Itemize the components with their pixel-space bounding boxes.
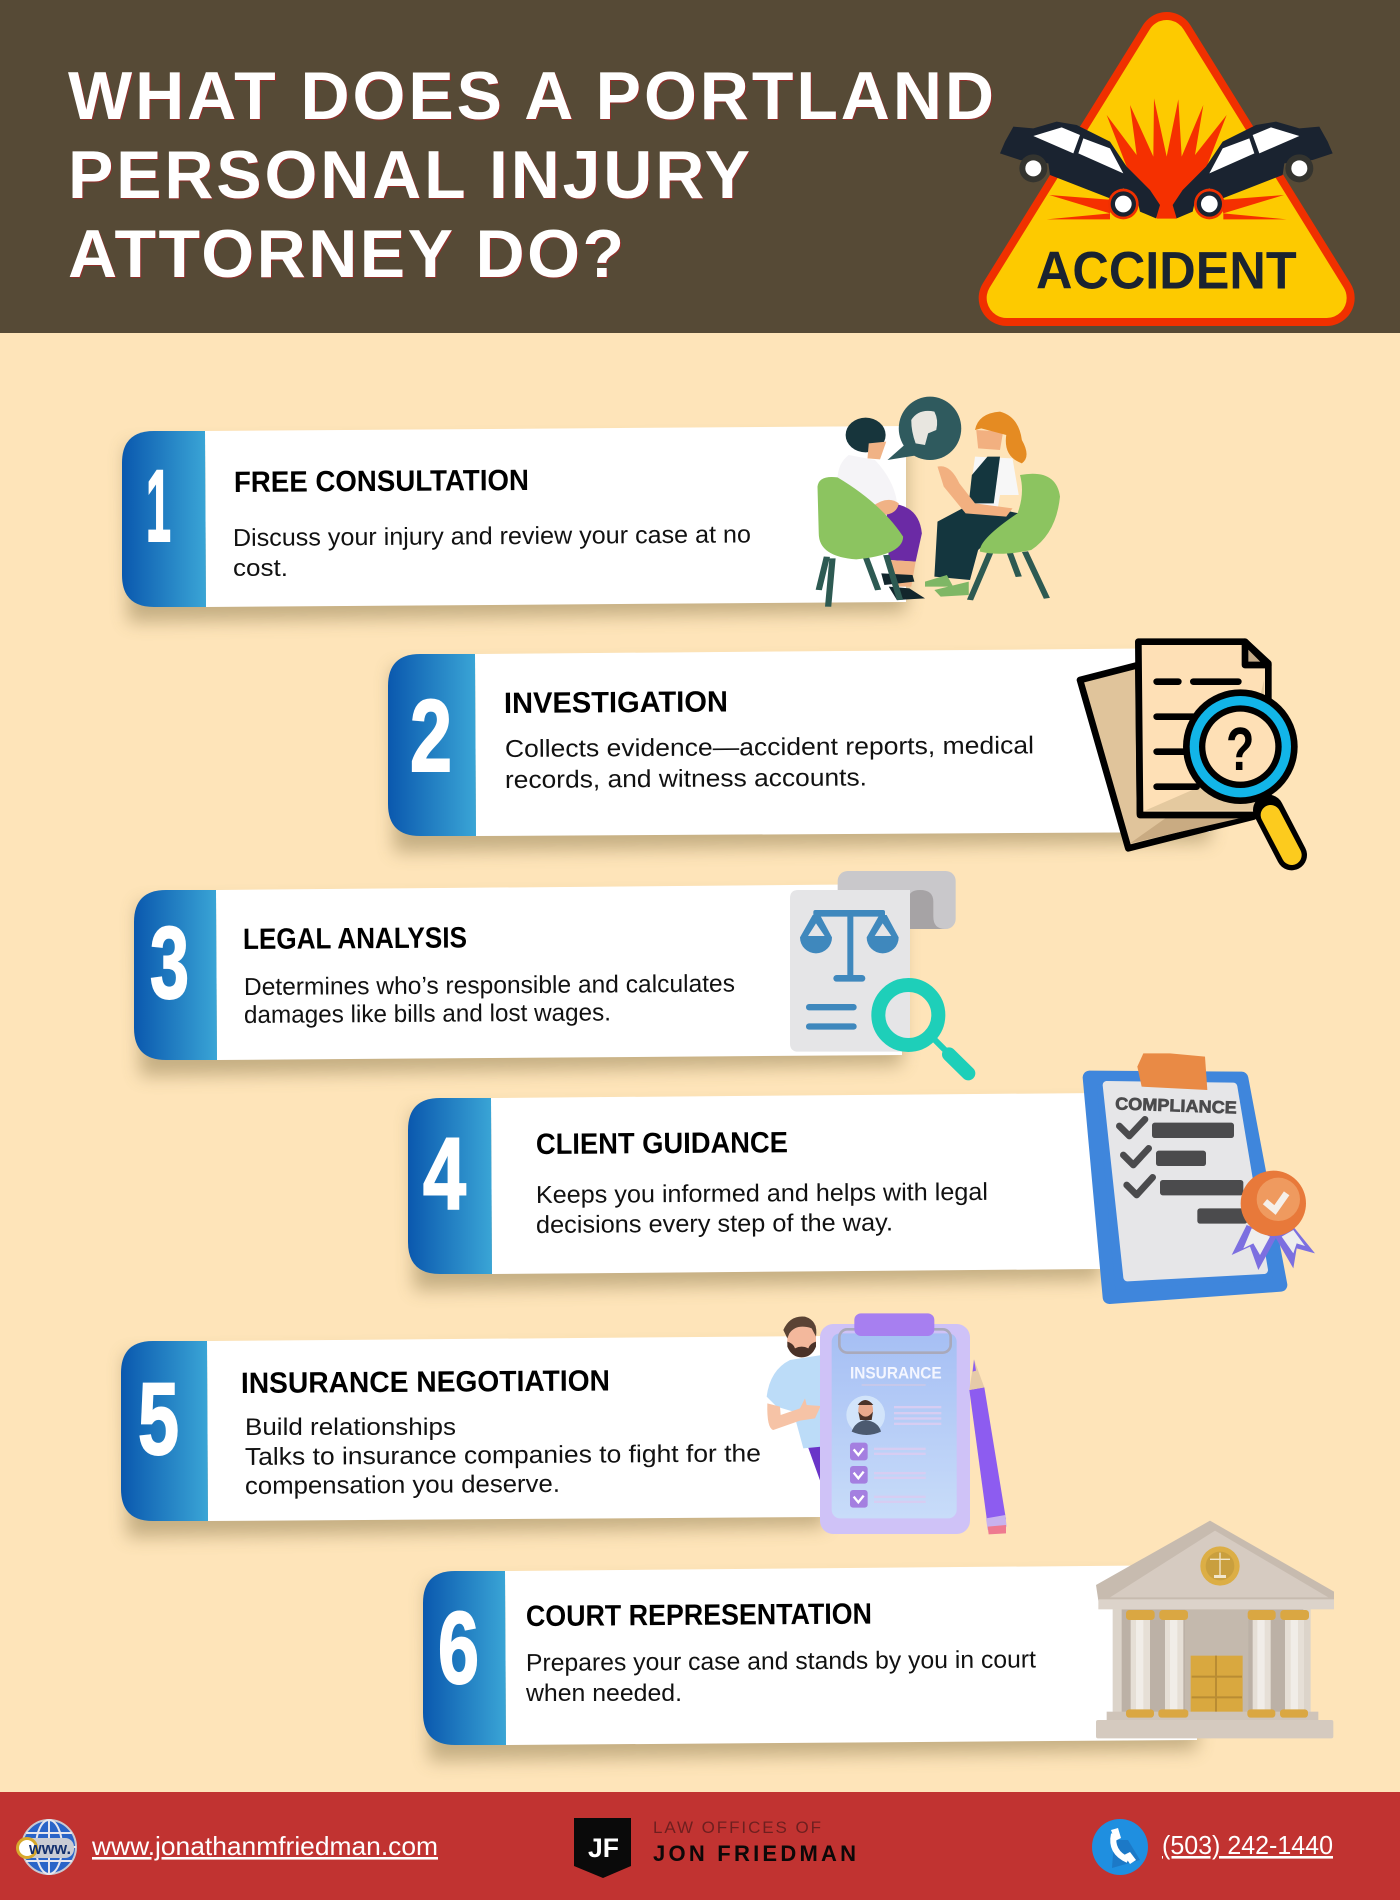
heading: FREE CONSULTATION <box>234 464 529 499</box>
number badge 1 <box>122 431 206 607</box>
icon: compliance clipboard with medal: COMPLIANCE <box>1115 1093 1237 1118</box>
body text: compensation you deserve. <box>245 1471 560 1500</box>
panel: step 1 free consultation <box>122 397 1060 622</box>
body text <box>233 521 751 582</box>
title <box>68 58 994 292</box>
icon: legal document with scales and magnifier <box>790 871 968 1073</box>
heading: INSURANCE NEGOTIATION <box>241 1364 610 1400</box>
number badge 5 <box>121 1341 208 1521</box>
man <box>767 1316 822 1485</box>
logo: Jon Friedman: JON FRIEDMAN <box>653 1841 856 1866</box>
speech bubble <box>888 397 961 460</box>
body text: Build relationships <box>245 1414 456 1441</box>
heading: CLIENT GUIDANCE <box>536 1126 788 1161</box>
number badge 4 <box>408 1098 492 1274</box>
scales of justice <box>800 910 899 1030</box>
title: ATTORNEY DO? <box>68 216 624 292</box>
number badge 1: 1 <box>146 449 171 563</box>
panel: step 2 investigation <box>388 642 1298 855</box>
icon: phone <box>1092 1819 1148 1875</box>
footer band <box>0 1792 1400 1900</box>
logo: Jon Friedman: LAW OFFICES OF <box>653 1818 821 1837</box>
title: WHAT DOES A PORTLAND <box>68 58 994 134</box>
number badge 5: 5 <box>138 1362 179 1476</box>
seated advisor with orange hair <box>925 412 1027 597</box>
number badge 2 <box>388 654 476 836</box>
body text: Determines who’s responsible and calculates <box>244 971 735 1001</box>
number badge 3 <box>134 890 217 1060</box>
phone number: (503) 242-1440 <box>1162 1830 1333 1860</box>
clipboard: INSURANCE <box>850 1363 942 1382</box>
body text: cost. <box>233 555 288 582</box>
icon: courthouse <box>1096 1521 1334 1738</box>
header band <box>0 0 1400 333</box>
icon: two people in consultation <box>818 397 1060 607</box>
heading: LEGAL ANALYSIS <box>243 921 467 956</box>
website link: www.jonathanmfriedman.com <box>91 1831 438 1861</box>
number badge 4: 4 <box>423 1117 466 1231</box>
icon: globe with www <box>18 1820 76 1874</box>
body text <box>244 971 735 1029</box>
logo: Jon Friedman <box>574 1818 856 1878</box>
body text: Discuss your injury and review your case at no <box>233 521 751 552</box>
heading: COURT REPRESENTATION <box>526 1598 872 1633</box>
panel: step 5 insurance negotiation <box>121 1313 1007 1537</box>
title: PERSONAL INJURY <box>68 137 750 213</box>
number badge 6: 6 <box>438 1591 479 1705</box>
left chair <box>818 477 903 607</box>
icon: accident warning sign: ACCIDENT <box>1036 241 1297 300</box>
body text: Collects evidence—accident reports, medical <box>505 732 1034 763</box>
panel: step 3 legal analysis <box>134 871 968 1076</box>
icon: globe with www: www. <box>28 1839 71 1858</box>
icon: compliance clipboard with medal <box>1089 1053 1315 1297</box>
icon: accident warning sign <box>1000 40 1333 300</box>
number badge 2: 2 <box>410 679 452 793</box>
body text: decisions every step of the way. <box>536 1210 893 1239</box>
body text <box>505 732 1034 794</box>
body text: records, and witness accounts. <box>505 764 867 794</box>
body text: Talks to insurance companies to fight for the <box>245 1440 761 1471</box>
icon: man pointing at insurance clipboard with pencil <box>767 1313 1007 1534</box>
number badge 3: 3 <box>150 906 189 1020</box>
icon: documents with magnifying glass <box>1080 642 1298 855</box>
body text: when needed. <box>525 1680 682 1707</box>
body text <box>245 1414 761 1500</box>
body text <box>536 1179 988 1239</box>
number badge 6 <box>423 1571 506 1745</box>
panel: step 6 court representation <box>423 1521 1334 1761</box>
right chair <box>970 474 1060 600</box>
logo: Jon Friedman: JF <box>588 1833 619 1863</box>
body text <box>525 1646 1036 1707</box>
body text: Prepares your case and stands by you in court <box>526 1646 1036 1677</box>
clipboard <box>820 1313 970 1534</box>
pencil <box>969 1359 1007 1534</box>
seated client with dark hair <box>838 418 925 600</box>
body text: Keeps you informed and helps with legal <box>536 1179 988 1209</box>
panel: step 4 client guidance <box>408 1053 1315 1297</box>
body text: damages like bills and lost wages. <box>244 999 611 1029</box>
magnifying glass <box>878 985 968 1073</box>
icon: documents with magnifying glass: ? <box>1226 715 1254 784</box>
heading: INVESTIGATION <box>504 685 728 720</box>
